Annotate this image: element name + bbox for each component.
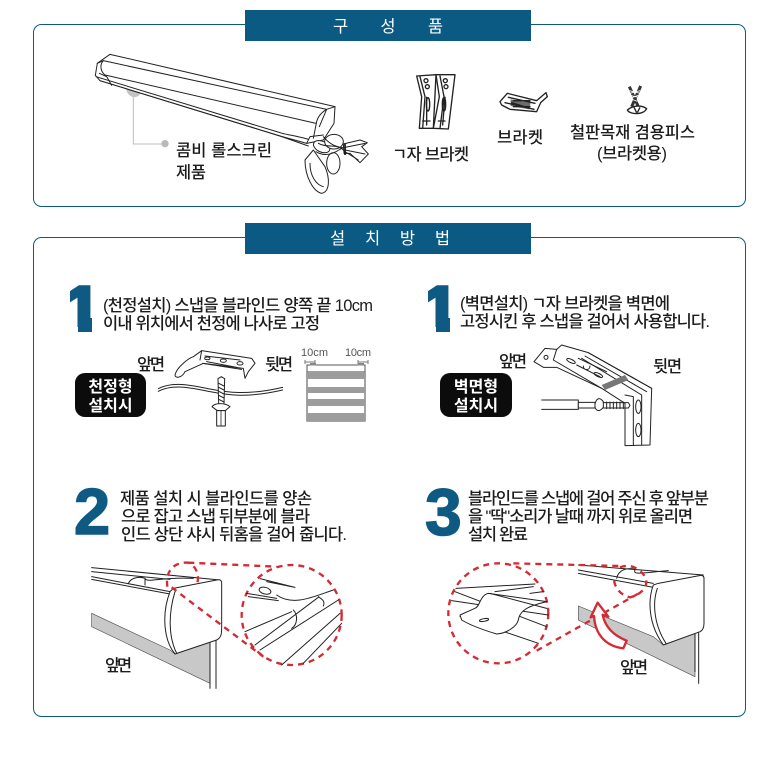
panel: installation — [34, 223, 746, 716]
label: back: 뒷면 — [653, 357, 682, 376]
step 3 — [425, 475, 709, 683]
illustration: step 3 blind with zoom detail — [448, 563, 704, 683]
heading: components — [245, 10, 531, 41]
icon: wall bracket and screw — [534, 345, 652, 446]
text: wall instructions: (벽면설치) ㄱ자 브라켓을 벽면에 — [460, 294, 670, 313]
badge: wall type: 벽면형 — [454, 378, 498, 396]
icon: screws — [627, 86, 647, 114]
label: front: 앞면 — [499, 352, 527, 371]
text: step 2 instructions: 제품 설치 시 블라인드를 양손 — [120, 489, 312, 508]
text: ceiling instructions — [103, 296, 373, 333]
label: front: 앞면 — [620, 658, 648, 677]
text: step 3 instructions: 을 "딱"소리가 날때 까지 위로 올리면 — [468, 507, 693, 526]
illustration: step 2 blind with zoom detail — [92, 563, 342, 688]
number 3: 3 — [425, 475, 462, 549]
number 1 left — [70, 285, 92, 332]
icon: bracket — [500, 93, 547, 112]
text: step 3 instructions — [468, 489, 709, 544]
label: back: 뒷면 — [265, 355, 293, 374]
icon: blind with 10cm marks — [301, 347, 371, 421]
icon: combi roll screen product — [95, 54, 368, 193]
icon: L bracket — [417, 75, 455, 129]
number 1 right: 1 — [419, 271, 461, 356]
number 1 left: 1 — [61, 271, 103, 356]
number 2: 2 — [74, 475, 110, 548]
step 2 — [74, 475, 347, 688]
panel: components — [34, 10, 746, 206]
heading: installation: 설 치 방 법 — [330, 229, 450, 248]
badge: ceiling type: 천정형 — [88, 378, 133, 396]
text: step 3 instructions: 설치 완료 — [468, 525, 528, 544]
step 1 ceiling — [70, 285, 372, 426]
badge: wall type — [440, 373, 512, 417]
text: ceiling instructions: (천정설치) 스냅을 블라인드 양쪽 끝 10cm — [103, 296, 373, 315]
number 1 right — [428, 285, 450, 332]
badge: ceiling type: 설치시 — [88, 397, 133, 415]
label: front: 앞면 — [105, 656, 132, 675]
badge: ceiling type — [75, 373, 146, 417]
label: product: 콤비 롤스크린 — [176, 141, 272, 160]
label: L bracket: ㄱ자 브라켓 — [392, 145, 469, 164]
badge: wall type: 설치시 — [454, 397, 498, 415]
icon: blind with 10cm marks: 10cm — [345, 347, 371, 359]
text: wall instructions: 고정시킨 후 스냅을 걸어서 사용합니다. — [460, 312, 710, 331]
label: screws: 철판목재 겸용피스 — [570, 123, 695, 142]
text: step 2 instructions: 으로 잡고 스냅 뒤부분에 블라 — [121, 507, 310, 526]
step 1 wall — [428, 285, 708, 446]
text: ceiling instructions: 이내 위치에서 천정에 나사로 고정 — [103, 314, 320, 333]
label: screws line 2: (브라켓용) — [597, 144, 667, 163]
label: bracket: 브라켓 — [497, 128, 543, 147]
text: step 2 instructions: 인드 상단 샤시 뒤홈을 걸어 줍니다. — [121, 525, 347, 544]
icon: blind with 10cm marks: 10cm — [301, 347, 328, 359]
heading: components: 구 성 품 — [333, 17, 443, 36]
heading: installation — [245, 223, 531, 254]
label: front: 앞면 — [137, 355, 165, 374]
icon: ceiling bracket and screw — [158, 351, 283, 426]
text: step 3 instructions: 블라인드를 스냅에 걸어 주신 후 앞부분 — [468, 489, 709, 508]
text: step 2 instructions — [120, 489, 347, 544]
label: product line 2: 제품 — [176, 163, 206, 182]
text: wall instructions — [460, 294, 710, 331]
